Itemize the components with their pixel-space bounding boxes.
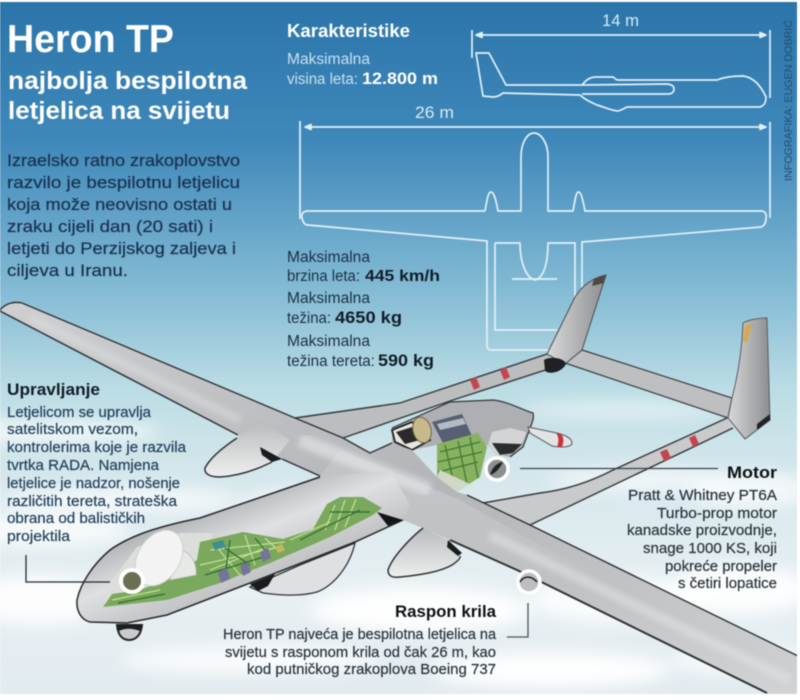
characteristics: speed and weight: 4650 kg: [335, 308, 402, 327]
characteristics: altitude: [287, 21, 438, 88]
characteristics: speed and weight: 590 kg: [378, 351, 434, 370]
engine housing: [392, 400, 533, 458]
callout text: Motor: Pratt & Whitney PT6A: [628, 487, 777, 504]
characteristics: speed and weight: Maksimalna: [287, 290, 370, 307]
callout text: Motor: snage 1000 KS, koji: [643, 540, 777, 557]
callout text: Motor: Motor: [727, 463, 777, 482]
right wing nacelle: [388, 528, 462, 577]
callout text: Raspon krila: kod putničkog zrakoplova Boeing 737: [247, 661, 496, 678]
characteristics: speed and weight: Maksimalna: [287, 333, 370, 350]
callout text: Motor: pokreće propeler: [665, 558, 777, 575]
callout text: Motor: s četiri lopatice: [678, 575, 777, 592]
cutaway cabin: [103, 533, 213, 607]
callout text: Raspon krila: Heron TP najveća je bespilotna letjelica na: [223, 626, 497, 643]
engine green structure: [437, 433, 487, 492]
callout text: Upravljanje: [7, 380, 187, 545]
credit: INFOGRAFIKA: EUGEN DOBRIĆ: [782, 20, 795, 181]
intro text block: Izraelsko ratno zrakoplovstvo: [7, 151, 240, 170]
title: najbolja bespilotna: [8, 67, 248, 95]
diagram: side view with 14 m dimension: [472, 11, 770, 111]
left tail fin: [544, 275, 606, 373]
callout text: Motor: Turbo-prop motor: [657, 505, 777, 522]
callout text: Upravljanje: letjelice je nadzor, nošenje: [7, 475, 180, 492]
right tail fin: [728, 318, 770, 439]
callout marker: Upravljanje: [26, 555, 143, 592]
callout text: Raspon krila: Raspon krila: [395, 602, 497, 621]
horizontal tail: [565, 350, 732, 418]
engine air intake and turbine: [392, 414, 472, 450]
cutaway green electronics: [103, 497, 382, 607]
diagram: top view with 26 m dimension: [300, 103, 770, 350]
label: 26 m: 26 m: [415, 103, 454, 122]
characteristics: speed and weight: [287, 249, 440, 370]
characteristics: speed and weight: težina:: [287, 310, 331, 327]
callout text: Upravljanje: Upravljanje: [7, 380, 100, 399]
left tail boom: [295, 354, 567, 438]
characteristics: altitude: Karakteristike: [287, 21, 410, 41]
intro text block: koja može neovisno ostati u: [7, 195, 232, 214]
callout text: Upravljanje: različitih tereta, strateška: [7, 493, 178, 510]
intro text block: razvilo je bespilotnu letjelicu: [7, 173, 240, 192]
title: [7, 18, 248, 125]
callout text: Upravljanje: projektila: [7, 528, 71, 545]
callout marker: Raspon krila: [507, 571, 540, 637]
callout text: Upravljanje: satelitskom vezom,: [7, 421, 138, 438]
lower fuselage pod: [250, 543, 355, 595]
right tail boom: [483, 418, 733, 526]
characteristics: speed and weight: brzina leta:: [287, 268, 360, 285]
callout text: Upravljanje: tvrtka RADA. Namjena: [7, 457, 160, 474]
title: letjelica na svijetu: [8, 97, 230, 125]
characteristics: speed and weight: 445 km/h: [365, 268, 440, 285]
characteristics: altitude: visina leta:: [287, 71, 358, 88]
intro text block: letjeti do Perzijskog zaljeva i: [7, 239, 236, 258]
callout text: Upravljanje: Letjelicom se upravlja: [7, 404, 152, 421]
callout text: Raspon krila: [223, 602, 497, 678]
main wing and centre section: [0, 302, 800, 694]
characteristics: speed and weight: težina tereta:: [287, 353, 375, 370]
propeller spinner: [528, 427, 572, 447]
callout text: Upravljanje: obrana od balističkih: [7, 510, 145, 527]
left wing nacelle: [205, 422, 290, 477]
characteristics: altitude: 12.800 m: [362, 69, 438, 88]
intro text block: [7, 151, 240, 280]
callout text: Motor: kanadske proizvodnje,: [627, 522, 777, 539]
characteristics: altitude: Maksimalna: [287, 51, 370, 68]
satellite dish: [125, 521, 196, 595]
fuselage: [77, 470, 410, 623]
intro text block: ciljeva u Iranu.: [7, 261, 128, 280]
nose sensor pod: [117, 624, 142, 640]
intro text block: zraku cijeli dan (20 sati) i: [7, 217, 213, 236]
title: Heron TP: [7, 18, 174, 61]
characteristics: speed and weight: Maksimalna: [287, 249, 370, 266]
callout text: Upravljanje: kontrolerima koje je razvila: [7, 439, 187, 456]
callout text: Motor: [627, 463, 777, 592]
callout marker: Motor: [486, 458, 718, 480]
label: 14 m: 14 m: [602, 11, 639, 30]
callout text: Raspon krila: svijetu s rasponom krila od čak 26 m, kao: [225, 644, 496, 661]
cloud layer: [0, 402, 800, 688]
